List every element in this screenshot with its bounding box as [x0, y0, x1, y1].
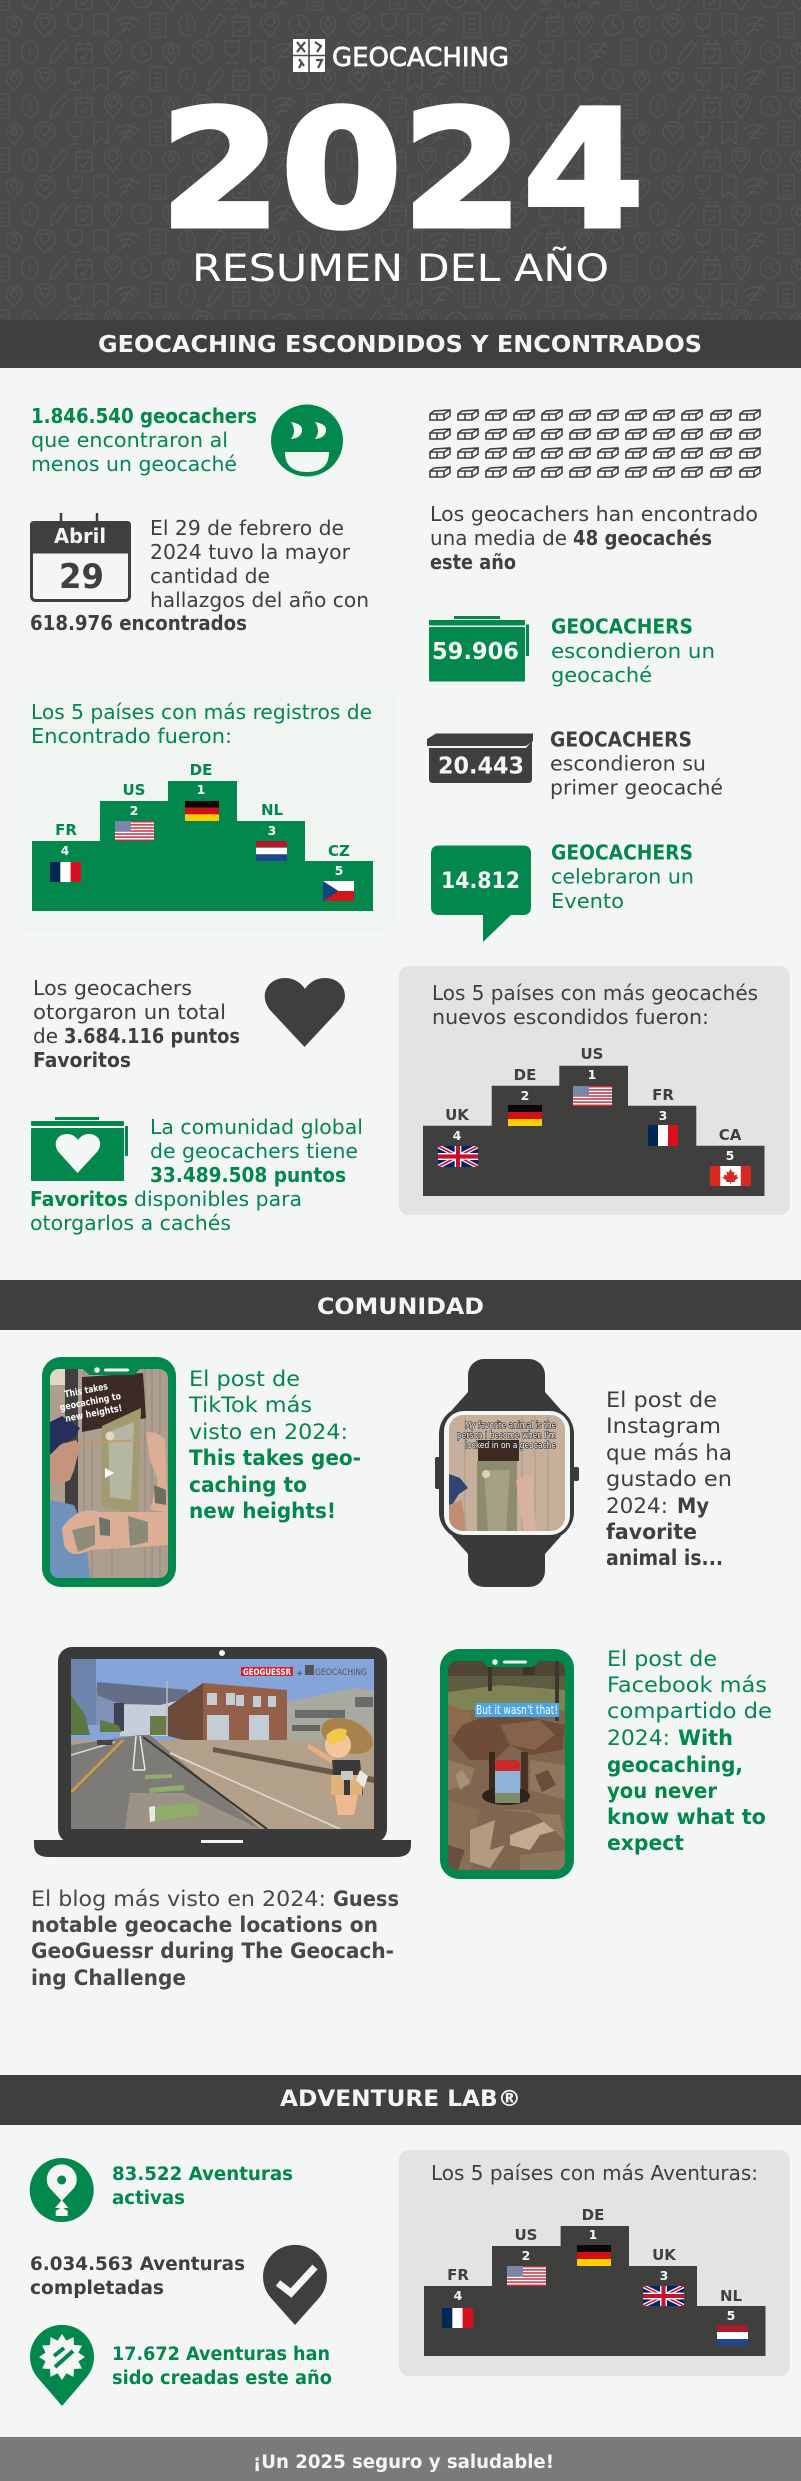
text: puntos Favoritos otorgados: 3.684.116 puntos [64, 1024, 240, 1048]
text: 29 de febrero: cantidad de [150, 564, 270, 588]
text: blog: GeoGuessr during The Geocach- [31, 1939, 394, 1963]
laptop screen photo [71, 1659, 378, 1829]
pictogram: 48 geocaches grid [430, 410, 760, 477]
text: Facebook: you never [607, 1779, 718, 1803]
text: media de 48 geocachés [430, 502, 758, 574]
flag: United Kingdom [438, 1146, 478, 1167]
can in the ground [489, 1752, 495, 1790]
text: media de 48 geocachés: una media de [430, 526, 567, 550]
stat: geocachers que encontraron [31, 404, 257, 476]
flag: Czechia [323, 881, 354, 901]
text: escondieron un geocaché: escondieron un [551, 639, 715, 663]
text: TikTok: El post de [189, 1367, 300, 1391]
text: 29 de febrero [30, 516, 369, 635]
flag: Canada [710, 1166, 751, 1186]
country labels: US [581, 1045, 603, 1063]
text: puntos Favoritos otorgados: de [33, 1024, 58, 1048]
text: TikTok: caching to [189, 1473, 307, 1497]
text: celebraron un Evento: celebraron un [551, 864, 694, 888]
text: blog: Guess [333, 1887, 399, 1911]
panel heading: Encontrado fueron: [31, 724, 232, 748]
phone: Facebook post [440, 1649, 574, 1879]
flag: United Kingdom [643, 2286, 684, 2306]
stat: geocachers que encontraron: que encontraron al [31, 428, 228, 452]
rank numbers: 1 [589, 2227, 597, 2242]
text: escondieron su primer geocaché: primer geocaché [550, 776, 723, 800]
text: comunidad global puntos favoritos: otorgarlos a cachés [30, 1211, 231, 1235]
text: blog [31, 1887, 399, 1990]
icon: smiley [271, 404, 343, 476]
rank numbers: 5 [335, 863, 343, 878]
rank numbers: 5 [727, 2308, 735, 2323]
rank numbers: 4 [61, 843, 70, 858]
subtitle: RESUMEN DEL AÑO [192, 246, 609, 290]
text: Instagram: My [677, 1494, 709, 1518]
panel heading [31, 700, 372, 748]
text: blog: ing Challenge [31, 1966, 186, 1990]
rank numbers: 2 [130, 803, 138, 818]
text: TikTok: visto en 2024: [189, 1420, 348, 1444]
phone notch [482, 1661, 539, 1667]
text: TikTok [188, 1367, 361, 1523]
panel heading: nuevos escondidos fueron: [432, 1005, 709, 1029]
country labels: CZ [328, 842, 350, 860]
panel: países geocachés nuevos [399, 966, 790, 1215]
rank numbers: 3 [659, 1108, 667, 1123]
icon: calendar: 29 [59, 557, 104, 597]
screen caption: new heights! [64, 1403, 123, 1425]
phone: TikTok post [42, 1357, 176, 1587]
text: Facebook: geocaching, [607, 1753, 743, 1777]
text: 29 de febrero: El 29 de febrero de [150, 516, 344, 540]
panel heading: Los 5 países con más registros de [31, 700, 372, 724]
text: aventuras activas: activas [112, 2188, 185, 2209]
text: puntos Favoritos otorgados: Favoritos [33, 1048, 131, 1072]
country labels: NL [261, 801, 283, 819]
text: escondieron un geocaché: GEOCACHERS [551, 614, 693, 638]
text: celebraron un Evento: GEOCACHERS [551, 840, 693, 864]
country labels [447, 2206, 742, 2305]
panel: países aventuras [399, 2150, 790, 2376]
section band: comunidad [0, 1280, 801, 1330]
text: Facebook: With [678, 1726, 733, 1750]
screen logos [241, 1665, 367, 1679]
text: blog: notable geocache locations on [31, 1913, 378, 1937]
text: Facebook: 2024: [607, 1726, 670, 1750]
icon: badge pin [30, 2325, 94, 2406]
character [321, 1718, 373, 1754]
podium chart [423, 1066, 764, 1196]
text: aventuras activas [112, 2164, 293, 2209]
screen caption [57, 1379, 125, 1425]
screen caption: This takes [64, 1381, 109, 1400]
footer band [0, 2437, 801, 2481]
text: Instagram: Instagram [606, 1414, 721, 1438]
flag: Germany [185, 801, 219, 821]
text: aventuras creadas: 17.672 Aventuras han [112, 2344, 330, 2365]
text: Facebook: expect [607, 1831, 684, 1855]
rank numbers: 5 [726, 1148, 734, 1163]
screen logos: GEOGUESSR [243, 1668, 291, 1678]
panel: países registros de encontrado [15, 686, 395, 932]
text: 29 de febrero: hallazgos del año con [150, 588, 369, 612]
text: TikTok: This takes geo- [189, 1446, 361, 1470]
text: aventuras completadas: completadas [30, 2278, 164, 2299]
header panel [0, 0, 801, 320]
screen caption: My favorite animal is the [465, 1421, 556, 1431]
icon: dark heart [265, 978, 345, 1047]
rank numbers: 2 [521, 1088, 529, 1103]
country labels: US [123, 781, 145, 799]
footer band: ¡Un 2025 seguro y saludable! [253, 2452, 554, 2473]
country labels [445, 1045, 742, 1144]
country labels: DE [514, 1066, 536, 1084]
text: celebraron un Evento: Evento [551, 889, 624, 913]
text: 29 de febrero: 618.976 encontrados [30, 611, 247, 635]
screen caption [457, 1421, 556, 1451]
rank numbers [61, 782, 343, 878]
title: 2024: 2024 [160, 77, 644, 265]
icon: speech bubble 14.812: 14.812 [441, 869, 520, 894]
icon: green cache 59.906: 59.906 [432, 639, 519, 665]
text: comunidad global puntos favoritos: de geocachers tiene [150, 1139, 358, 1163]
text: Instagram: favorite [606, 1520, 697, 1544]
rank numbers: 4 [454, 2288, 463, 2303]
text: puntos Favoritos otorgados: otorgaron un total [33, 1000, 226, 1024]
text: 29 de febrero: 2024 tuvo la mayor [150, 540, 351, 564]
icon: calendar: Abril [54, 524, 106, 548]
rank numbers [454, 2227, 735, 2323]
rank numbers: 3 [660, 2268, 668, 2283]
icon: adventure pin circle [30, 2158, 94, 2222]
section band: adventure lab [0, 2075, 801, 2125]
icon: dark cache 20.443 [427, 734, 533, 783]
text: escondieron un geocaché: geocaché [551, 663, 652, 687]
country labels: NL [720, 2287, 742, 2305]
icon: green cache 59.906 [429, 616, 529, 682]
text: aventuras activas: 83.522 Aventuras [112, 2164, 293, 2185]
section band: escondidos y encontrados: GEOCACHING ESCONDIDOS Y ENCONTRADOS [98, 332, 702, 358]
rank numbers: 2 [522, 2248, 530, 2263]
text: escondieron su primer geocaché: escondieron su [550, 752, 706, 776]
flag: France [50, 862, 81, 882]
panel heading: Los 5 países con más geocachés [432, 981, 758, 1005]
flag: Germany [508, 1105, 542, 1126]
country labels: UK [445, 1106, 470, 1124]
text: media de 48 geocachés: 48 geocachés [573, 526, 712, 550]
text: Instagram: El post de [606, 1388, 717, 1412]
country labels: US [515, 2226, 537, 2244]
panel heading [432, 981, 758, 1029]
text: Instagram: que más ha [606, 1441, 732, 1465]
country labels: FR [652, 1086, 674, 1104]
text: escondieron su primer geocaché [550, 728, 723, 800]
text: Facebook: compartido de [607, 1699, 772, 1723]
country labels [55, 761, 350, 860]
text: aventuras completadas: 6.034.563 Aventuras [30, 2254, 245, 2275]
country labels: CA [719, 1126, 742, 1144]
text: comunidad global puntos favoritos: Favoritos [30, 1187, 128, 1211]
text: comunidad global puntos favoritos: La comunidad global [150, 1115, 363, 1139]
rank numbers: 4 [453, 1128, 462, 1143]
text: escondieron su primer geocaché: GEOCACHERS [550, 728, 692, 752]
flag: United States [507, 2266, 546, 2286]
text: Instagram: animal is... [606, 1546, 723, 1570]
text: Instagram: 2024: [606, 1494, 668, 1518]
text: comunidad global puntos favoritos: disponibles para [134, 1187, 302, 1211]
text: Instagram [606, 1388, 732, 1570]
text: Facebook: Facebook más [607, 1673, 767, 1697]
icon: calendar [30, 513, 131, 600]
flag: France [648, 1125, 678, 1146]
panel heading: Los 5 países con más Aventuras: [431, 2161, 758, 2185]
text: media de 48 geocachés: Los geocachers han encontrado [430, 502, 758, 526]
section band: adventure lab: ADVENTURE LAB® [280, 2087, 521, 2112]
screen logos: + [296, 1669, 304, 1679]
text: aventuras completadas [30, 2254, 245, 2299]
rank numbers: 1 [588, 1067, 596, 1082]
text: puntos Favoritos otorgados: Los geocachers [33, 976, 192, 1000]
text: comunidad global puntos favoritos [30, 1115, 363, 1235]
icon: check pin [263, 2245, 327, 2325]
flag: Netherlands [717, 2325, 748, 2346]
text: aventuras creadas [112, 2344, 332, 2389]
rank numbers: 3 [268, 823, 276, 838]
country labels: FR [55, 821, 77, 839]
text: Facebook: El post de [607, 1647, 717, 1671]
section band: comunidad: COMUNIDAD [317, 1295, 484, 1320]
section band: escondidos y encontrados [0, 320, 801, 368]
country labels: FR [447, 2266, 469, 2284]
flag: France [442, 2308, 473, 2328]
text: TikTok: TikTok más [188, 1393, 312, 1417]
rank numbers [453, 1067, 734, 1163]
flag: United States [573, 1086, 612, 1106]
logo: Geocaching: GEOCACHING [332, 43, 509, 73]
text: celebraron un Evento [551, 840, 694, 913]
text: Facebook [607, 1647, 772, 1855]
text: aventuras creadas: sido creadas este año [112, 2368, 332, 2389]
podium chart [424, 2226, 766, 2356]
stat: geocachers que encontraron: 1.846.540 geocachers [31, 404, 257, 428]
text: puntos Favoritos otorgados [33, 976, 240, 1072]
icon: speech bubble 14.812 [431, 846, 531, 942]
screen caption: person I become when I'm [457, 1431, 556, 1441]
country labels: DE [582, 2206, 604, 2224]
country labels: UK [652, 2246, 677, 2264]
icon: dark cache 20.443: 20.443 [438, 754, 524, 780]
screen caption: But it wasn't that! [476, 1703, 558, 1717]
icon: green cache with heart [31, 1117, 128, 1181]
country labels: DE [190, 761, 212, 779]
laptop: blog post [34, 1647, 411, 1857]
phone notch [83, 1369, 140, 1375]
text: blog: El blog más visto en 2024: [31, 1887, 326, 1911]
text: TikTok: new heights! [189, 1499, 336, 1523]
podium chart [32, 781, 373, 911]
screen caption: geocaching to [59, 1391, 122, 1414]
screen logos: GEOCACHING [315, 1668, 367, 1678]
flag: Germany [577, 2245, 611, 2266]
text: Instagram: gustado en [606, 1467, 732, 1491]
stat: geocachers que encontraron: menos un geocaché [31, 452, 237, 476]
text: media de 48 geocachés: este año [430, 550, 516, 574]
flag: United States [115, 821, 154, 841]
screen caption: locked in on a geocache [465, 1441, 556, 1451]
rank numbers: 1 [197, 782, 205, 797]
text: escondieron un geocaché [551, 614, 715, 687]
text: Facebook: know what to [607, 1805, 766, 1829]
text: comunidad global puntos favoritos: 33.489.508 puntos [150, 1163, 346, 1187]
smartwatch: Instagram post [435, 1359, 579, 1587]
flag: Netherlands [256, 841, 287, 861]
